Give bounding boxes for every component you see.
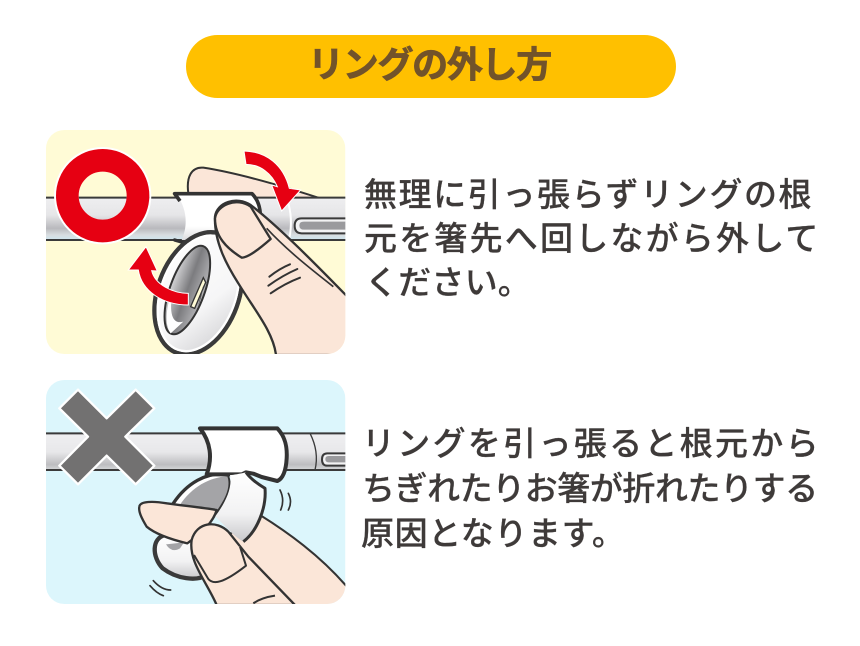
instruction text: correct way: ください。 (365, 264, 531, 301)
thumb nail (215, 202, 271, 258)
thumb (191, 524, 295, 605)
back finger (186, 166, 319, 197)
loose ring (152, 230, 243, 354)
hand (214, 516, 346, 604)
finger wrinkles (268, 264, 300, 293)
thumb (215, 201, 348, 355)
title pill (186, 35, 676, 98)
pencil shaft (43, 198, 348, 240)
ring band on pencil (175, 194, 261, 242)
motion lines (150, 490, 290, 596)
ring, inner disc (166, 474, 229, 550)
instruction text: correct way (364, 176, 821, 301)
mark: cross NG (59, 390, 154, 484)
thumb nail (194, 547, 246, 582)
index finger (139, 502, 217, 543)
instruction text: correct way: 無理に引っ張らずリングの根 (364, 176, 813, 213)
instruction text: wrong way: 原因となります。 (361, 515, 626, 552)
arrow: rotate upward (128, 247, 188, 305)
ring, lower part (152, 536, 202, 581)
instruction text: wrong way: ちぎれたりお箸が折れたりする (362, 470, 818, 507)
ring, torn strip (215, 472, 265, 542)
thumb side crease (267, 228, 333, 287)
panel: correct way to remove ring (46, 130, 346, 354)
ring band, stretched and tearing (200, 428, 287, 481)
instruction text: wrong way: リングを引っ張ると根元から (362, 425, 821, 462)
instruction text: wrong way (361, 425, 821, 552)
mark: circle OK (55, 148, 150, 243)
arrow: rotate downward (244, 151, 301, 211)
palm crease (253, 596, 275, 603)
instruction text: correct way: 元を箸先へ回しながら外して (364, 220, 821, 257)
title text: リングの外し方 (308, 44, 551, 85)
panel: wrong way to remove ring (46, 380, 346, 604)
pencil shaft (43, 433, 348, 470)
